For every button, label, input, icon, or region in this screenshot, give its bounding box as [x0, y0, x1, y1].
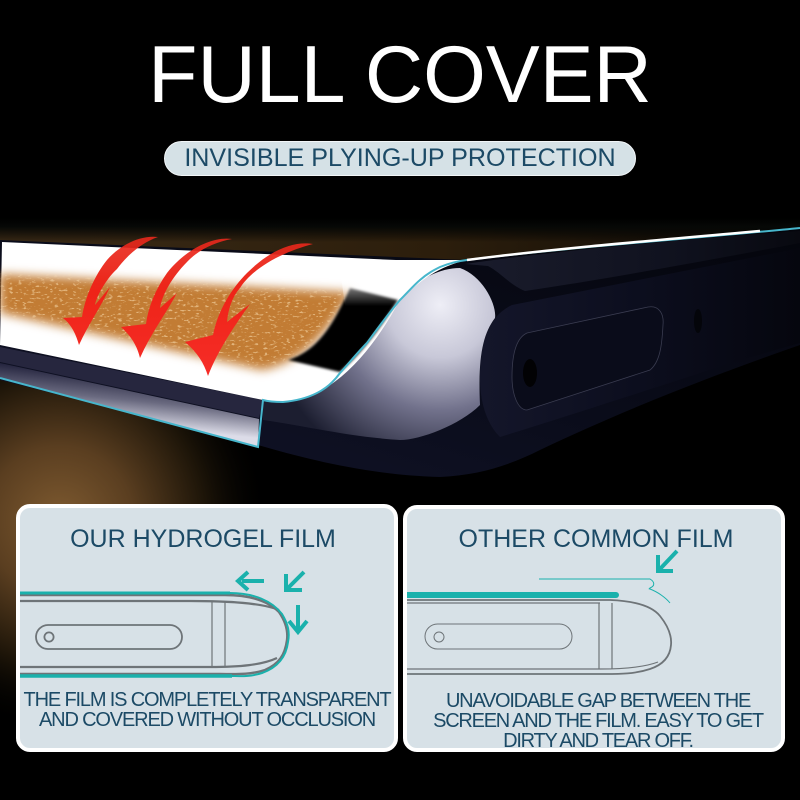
- blue film edge: [0, 228, 800, 447]
- port hole: [523, 359, 537, 387]
- upper glass slope: [465, 231, 800, 291]
- red arrows: [63, 237, 313, 376]
- caption: hydrogel: AND COVERED WITHOUT OCCLUSION: [39, 709, 375, 731]
- heading: our hydrogel film: OUR HYDROGEL FILM: [70, 525, 336, 553]
- background glow bands: [0, 218, 800, 760]
- end plate: [480, 248, 800, 437]
- caption: gap: [433, 690, 764, 752]
- caption: gap: SCREEN AND THE FILM. EASY TO GET: [433, 710, 763, 732]
- arrow: left: [238, 572, 264, 590]
- subtitle pill: INVISIBLE PLYING-UP PROTECTION: [184, 144, 616, 172]
- arrow: down: [289, 605, 307, 632]
- lower side strip: [0, 347, 263, 418]
- lower film strip: [0, 363, 259, 447]
- lifted film line: [539, 579, 670, 603]
- orange glitter band: [0, 266, 350, 378]
- heading: other common film: OTHER COMMON FILM: [458, 525, 734, 553]
- hero illustration: phone edge with film: [0, 226, 800, 690]
- speaker slot: [512, 307, 663, 410]
- phone body: [0, 228, 800, 477]
- mic hole: [694, 309, 702, 333]
- title: FULL COVER: [148, 30, 652, 120]
- caption: gap: DIRTY AND TEAR OFF.: [503, 730, 693, 752]
- panel: other common film: [403, 505, 785, 752]
- arrow: diagonal: [286, 572, 304, 590]
- caption: hydrogel: [24, 689, 392, 731]
- arrow: diagonal: [658, 551, 677, 571]
- black reflection on film: [288, 288, 398, 372]
- rounded cap highlight: [263, 268, 495, 440]
- caption: hydrogel: THE FILM IS COMPLETELY TRANSPARENT: [24, 689, 390, 711]
- panel: our hydrogel film: [16, 504, 398, 752]
- white film: [0, 242, 467, 402]
- caption: gap: UNAVOIDABLE GAP BETWEEN THE: [446, 690, 750, 712]
- film bar: [407, 592, 616, 598]
